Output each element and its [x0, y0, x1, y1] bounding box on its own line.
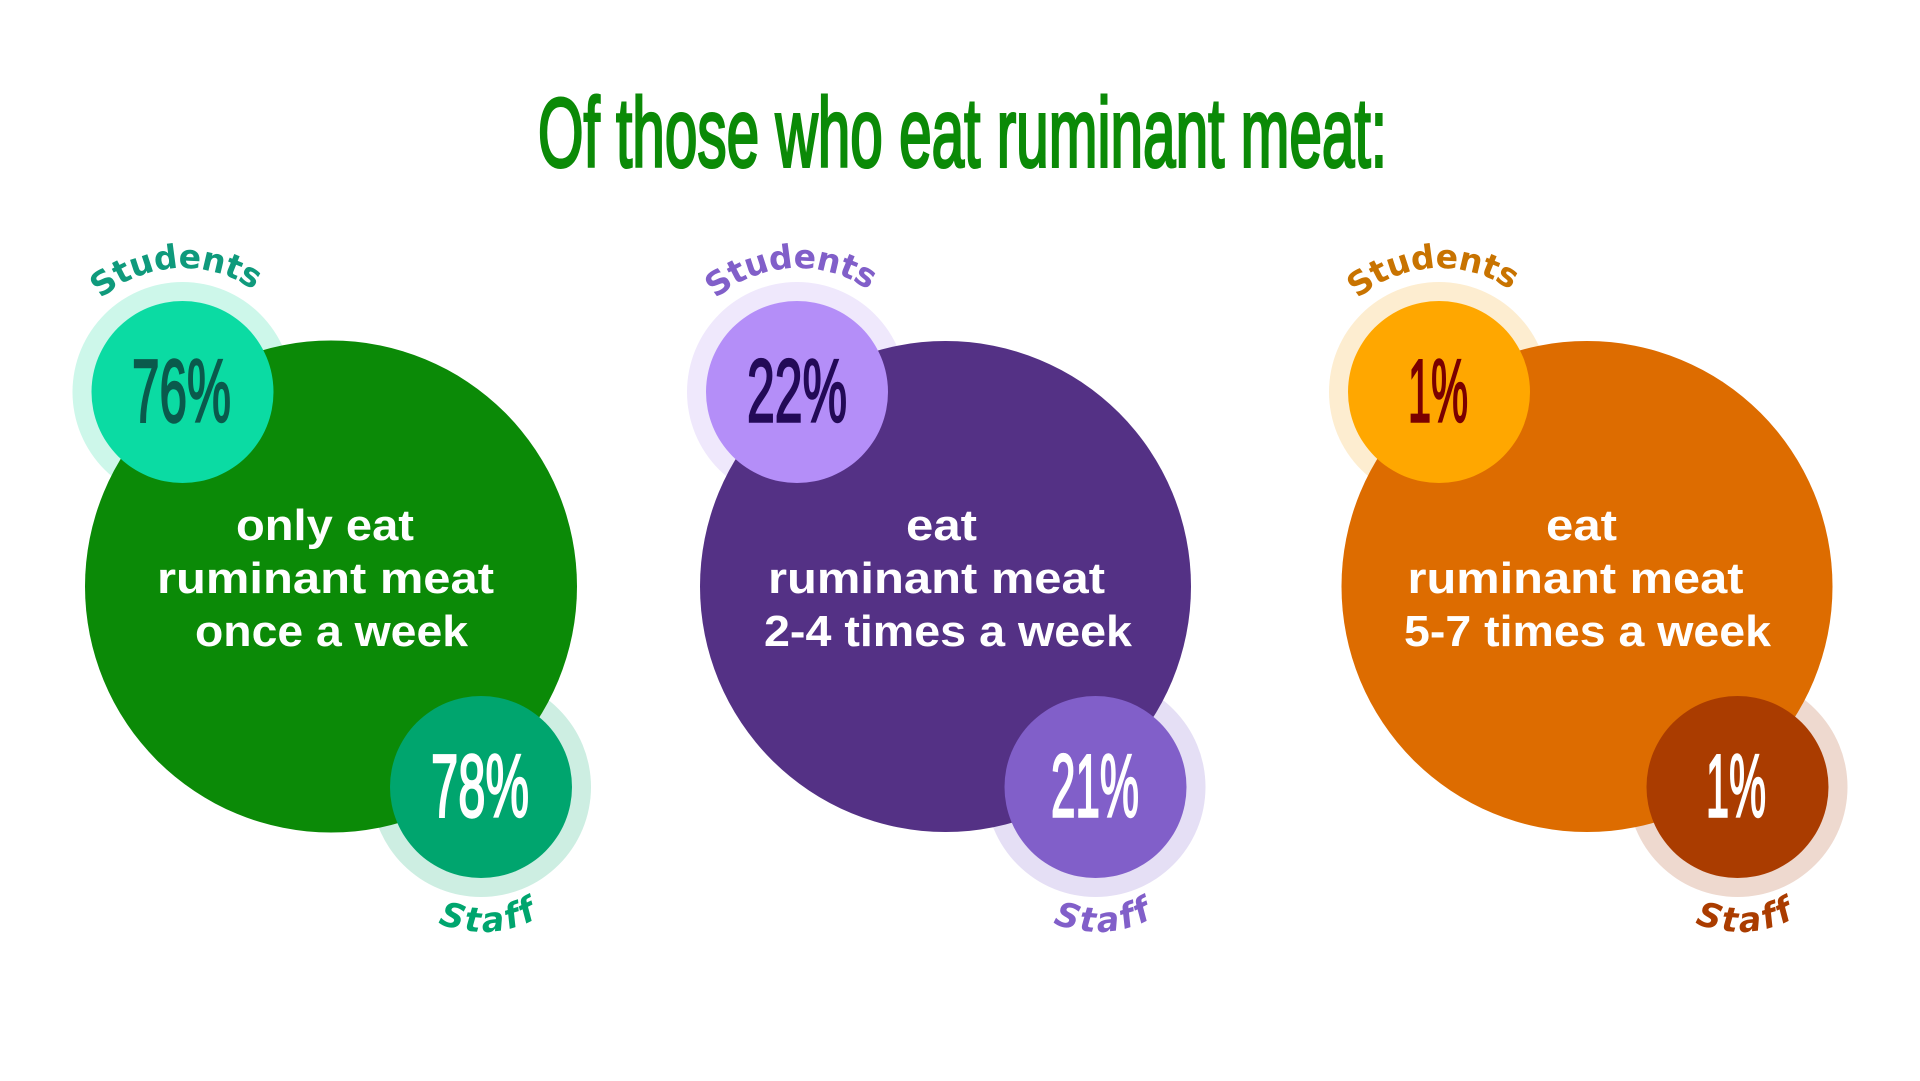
description: once a week — [195, 607, 469, 656]
staff halo ring — [371, 677, 591, 897]
description — [157, 501, 494, 656]
panel: 5-7 times a week — [1329, 243, 1848, 932]
description — [1404, 501, 1772, 656]
student halo ring — [1329, 282, 1549, 502]
panel: 2-4 times a week: 21% — [1051, 736, 1139, 836]
student halo ring — [72, 282, 292, 502]
panel: 5-7 times a week: 1% — [1706, 736, 1766, 836]
staff value: 78% — [431, 736, 529, 836]
description: ruminant meat — [768, 554, 1105, 603]
panel: 5-7 times a week: 1% — [1408, 340, 1468, 440]
description: 2-4 times a week — [764, 607, 1133, 656]
description: only eat — [236, 501, 414, 550]
staff label: Staff — [438, 893, 532, 932]
description: ruminant meat — [1408, 554, 1744, 603]
description: 5-7 times a week — [1404, 607, 1772, 656]
title: Of those who eat ruminant meat: — [538, 78, 1387, 188]
staff circle — [1646, 696, 1828, 878]
student circle — [92, 301, 274, 483]
staff label: Staff — [1696, 893, 1790, 932]
student circle — [1348, 301, 1530, 483]
description: eat — [1546, 501, 1617, 550]
panel: 2-4 times a week — [687, 243, 1206, 932]
description: ruminant meat — [157, 554, 494, 603]
student halo ring — [687, 282, 907, 502]
students label: Students — [706, 243, 876, 296]
students label: Students — [1348, 243, 1518, 296]
panel: once a week — [72, 243, 591, 932]
student value: 76% — [132, 340, 231, 440]
student circle — [706, 301, 888, 483]
description: eat — [906, 501, 977, 550]
students label: Students — [90, 243, 260, 296]
staff halo ring — [986, 677, 1206, 897]
main circle: orange — [1342, 341, 1832, 832]
staff label: Staff — [1054, 893, 1148, 932]
main circle: purple — [700, 341, 1191, 832]
staff halo ring — [1628, 677, 1848, 897]
staff circle — [1004, 696, 1186, 878]
description — [764, 501, 1133, 656]
main circle: green — [85, 340, 577, 832]
student value: 22% — [747, 340, 847, 440]
staff circle — [390, 696, 572, 878]
